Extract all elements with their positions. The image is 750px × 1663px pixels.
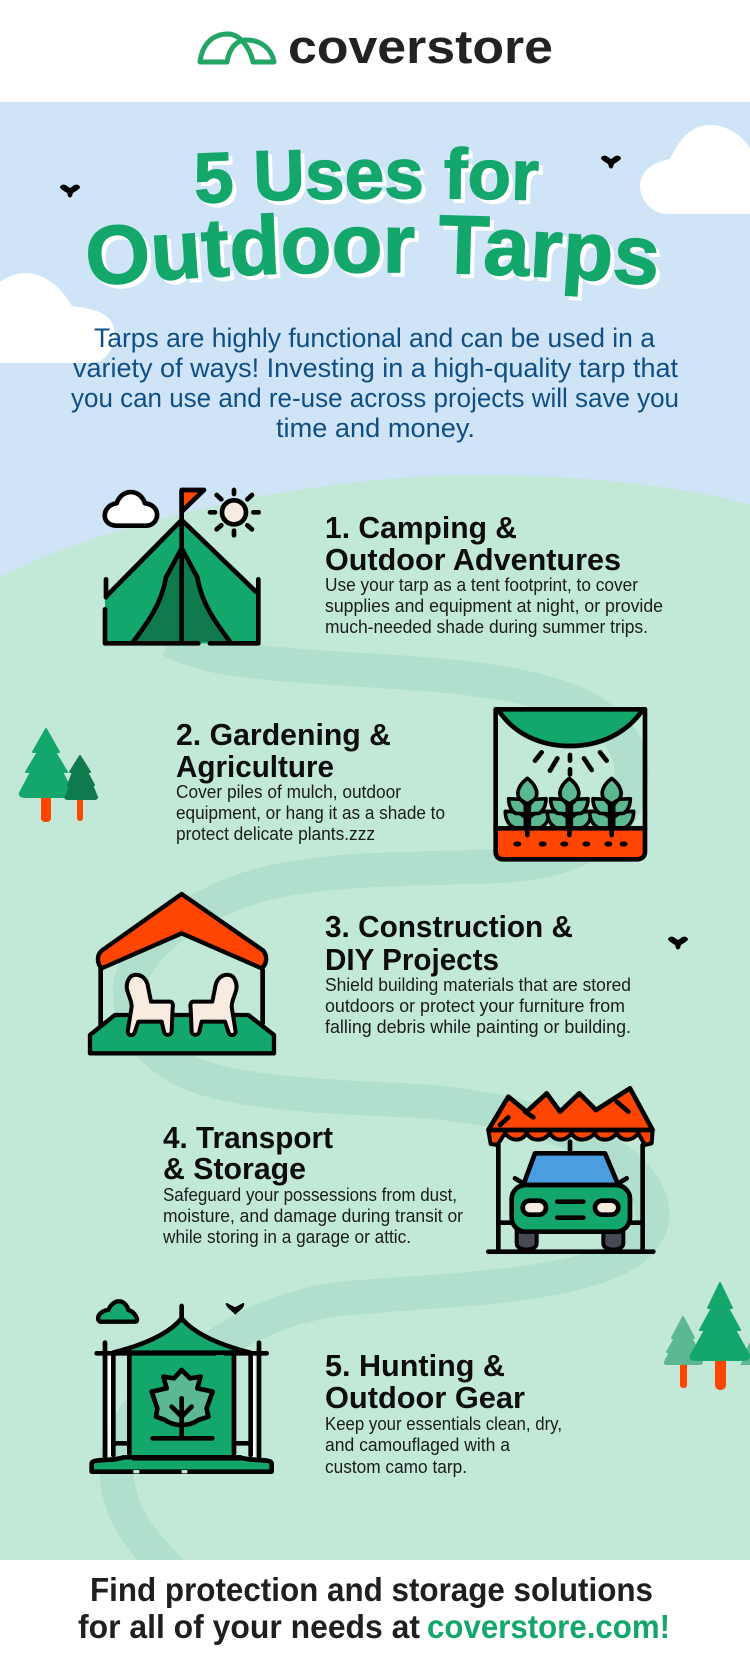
heading: [325, 1348, 525, 1415]
intro paragraph: you can use and re-use across projects will save you: [71, 383, 679, 413]
description: Shield building materials that are stored: [325, 975, 631, 995]
item 5: hunting: [92, 1301, 562, 1477]
description: protect delicate plants.zzz: [176, 824, 375, 844]
description: equipment, or hang it as a shade to: [176, 803, 445, 823]
cloud: left: [0, 273, 114, 363]
item 4: transport: [162, 1088, 653, 1252]
heading: 1. Camping &: [325, 510, 517, 545]
description: [325, 1414, 562, 1477]
header band: [0, 0, 750, 102]
footer call to action: for all of your needs at: [78, 1608, 420, 1645]
description: Safeguard your possessions from dust,: [163, 1185, 457, 1205]
item 1: camping: [105, 490, 663, 643]
description: falling debris while painting or building.: [325, 1017, 631, 1037]
bird: left: [60, 185, 80, 198]
description: custom camo tarp.: [325, 1457, 467, 1477]
heading: 4. Transport: [163, 1120, 333, 1155]
winding road: [116, 640, 653, 1580]
description: supplies and equipment at night, or provide: [325, 596, 663, 616]
heading: & Storage: [163, 1151, 306, 1186]
heading: [325, 510, 621, 577]
description: [162, 1185, 463, 1247]
title: [88, 146, 660, 301]
icon: shade over plants: [496, 709, 645, 859]
title: Outdoor Tarps: [88, 212, 660, 301]
description: [325, 975, 631, 1037]
icon: car under canopy: [488, 1088, 653, 1252]
heading: [325, 909, 573, 977]
logo: [200, 20, 553, 73]
intro paragraph: [71, 323, 679, 443]
description: moisture, and damage during transit or: [163, 1206, 463, 1226]
title: 5 Uses for: [196, 146, 543, 208]
item 3: construction: [90, 894, 688, 1053]
heading: Outdoor Gear: [325, 1380, 525, 1415]
icon: canopy with chairs: [90, 894, 274, 1053]
footer call to action: [78, 1571, 670, 1645]
footer band: [0, 1560, 750, 1663]
item 2: gardening: [176, 709, 645, 859]
heading: Outdoor Adventures: [325, 542, 621, 577]
icon: tent: [105, 490, 259, 643]
footer call to action: coverstore.com!: [427, 1608, 670, 1645]
bird: right: [601, 156, 621, 168]
trees: right: [665, 1283, 750, 1390]
icon: hunting blind: [92, 1301, 272, 1472]
description: Keep your essentials clean, dry,: [325, 1414, 562, 1434]
description: Cover piles of mulch, outdoor: [176, 782, 401, 802]
cloud: top right: [640, 125, 750, 214]
description: while storing in a garage or attic.: [162, 1227, 411, 1247]
heading: 2. Gardening &: [176, 717, 391, 752]
logo: coverstore: [288, 20, 553, 73]
heading: Agriculture: [176, 749, 334, 784]
description: Use your tarp as a tent footprint, to cover: [325, 575, 638, 595]
bird: [668, 937, 688, 950]
heading: 3. Construction &: [325, 909, 573, 944]
sky background: [0, 102, 750, 622]
footer call to action: Find protection and storage solutions: [90, 1571, 653, 1608]
heading: [176, 717, 391, 784]
trees: left: [20, 729, 97, 822]
green hill background: [0, 475, 750, 1570]
heading: DIY Projects: [325, 942, 499, 977]
description: outdoors or protect your furniture from: [325, 996, 625, 1016]
description: [176, 782, 445, 844]
heading: [163, 1120, 333, 1186]
intro paragraph: time and money.: [276, 413, 475, 443]
description: [325, 575, 663, 637]
heading: 5. Hunting &: [325, 1348, 505, 1383]
intro paragraph: Tarps are highly functional and can be used in a: [94, 323, 656, 353]
intro paragraph: variety of ways! Investing in a high-quality tarp that: [73, 353, 678, 383]
description: and camouflaged with a: [325, 1435, 511, 1455]
description: much-needed shade during summer trips.: [325, 617, 648, 637]
